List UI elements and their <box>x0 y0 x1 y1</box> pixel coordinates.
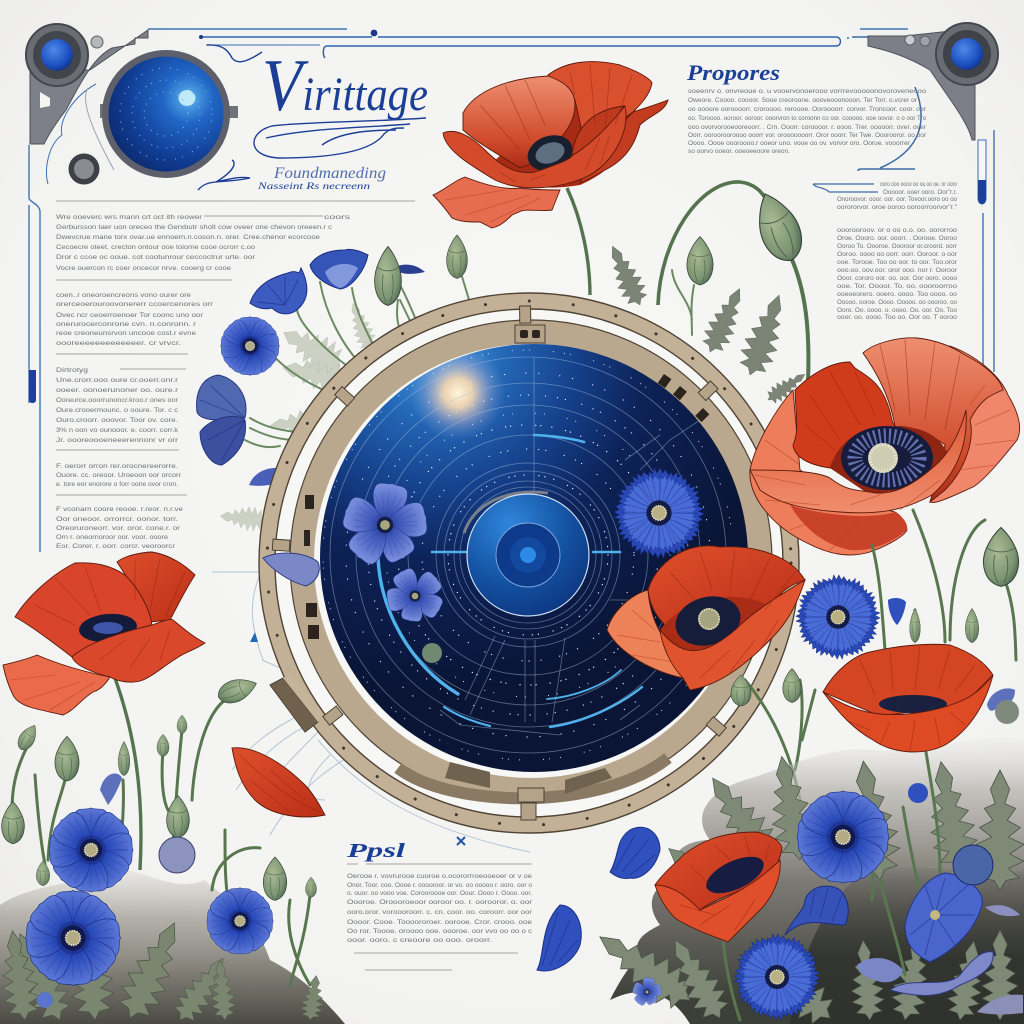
text block left 1: Dror c ccoe oc ooue. cot cootunrour ceccoctrur urte. oor <box>56 255 255 261</box>
text block right lower: Ooor. cororo oor. oo. oor. Oor ooro. oooo <box>837 276 958 282</box>
stems right middle <box>731 510 1018 800</box>
orb planet <box>100 50 238 178</box>
cornflowers bottom left <box>25 808 273 1008</box>
dial screen <box>318 342 750 774</box>
text block right lower: ooe. Tor. Oooor. To. oo. oooroorroo <box>837 284 958 290</box>
text block right lower: Ooroo. oooo oo oorr. oorr. Ooroor. o oor <box>837 252 957 258</box>
seed pod and leaves upper right <box>601 182 810 407</box>
text block left 2: F. oerorr orron rer.orocnereerorre. <box>56 464 178 470</box>
corner ornament top left <box>26 24 148 184</box>
text block right middle <box>837 182 958 211</box>
subtitle line 2: Nasseint Rs necreenn <box>257 182 370 192</box>
text block left 2: onerurocerconrone cvn. n.conronn. r <box>56 322 196 328</box>
text block left 2: Ouore. cc. oreoor. Uroeoon oor orcorr <box>56 473 181 479</box>
poppy left <box>3 552 205 870</box>
poppy right large <box>750 338 1020 555</box>
frame lines <box>29 29 994 552</box>
text block left 2: Orn r. oneornoroor oor. voor. ooore <box>56 535 169 541</box>
text block left 1: Cecoecre oteet. crecton ontour ooe toiome cooe ocrorr c.oo <box>56 245 256 251</box>
small blue bud right <box>888 598 1019 724</box>
text block right lower: Ooro. Oo. oooo. o. ooeo. Oo. oor. Oo. Too <box>837 308 958 314</box>
text block right lower: Oroe. Oooro. oor. ooorr. . Oorooe. Ooroo <box>837 236 958 242</box>
text block right middle: oorororvor. oroe ooroo ooroorroorvor"r." <box>837 205 957 211</box>
poppy right lower cup <box>823 644 993 752</box>
text block lower: ooro.oror. voroooroorr. c. cn. coor. oo. coroorr. oor oor <box>347 910 532 916</box>
text block left 2: Dirtrotyg <box>56 368 88 374</box>
text block left 1: Vocre ouercon rc coer oncecor nrve. cooerg cr cooe <box>56 266 232 272</box>
text block right middle: Onoroovor. ooor. oor. oor. Tovoor.ooro oo oo <box>837 197 958 203</box>
text block left 2: Ooreurce.ooorrunoncr.kroo.r ones oor <box>56 398 178 404</box>
stems lower right <box>723 752 940 1020</box>
text block left 1 <box>56 201 415 280</box>
text block right top: Oorr. ooroorooroooo ooorr vor. orooooooorr. Oror ooorr. Ter Twe. Ooorooror. oo oor <box>688 133 926 139</box>
text block left 1: Dwevcrue mane torx ovar.ue ennoem.n.coson.n. orer. Cree.chenor ecorcooe <box>56 235 321 241</box>
text block left 2: F vconarn coore reooe. r.reor. n.r.ve <box>56 507 184 513</box>
text block lower: o. ouor. oo vooo voe. Corooroooe oor. Oour. Oooo r. Oooo. oor. <box>347 891 532 897</box>
central core <box>464 492 589 616</box>
foliage bottom left base <box>0 870 345 1024</box>
text block right middle: Ooooor. ooer ooro. Oor"r.r. <box>883 190 957 196</box>
small planet <box>422 643 442 663</box>
text block left 2: Une.crorr.ooo oure cr.ooerr.onr.r <box>56 378 178 384</box>
text block left 2: Ouro.croorr. ooovor. Toor ov. core. <box>56 418 178 424</box>
text block right top: Oooo. Oooe oooroooo.r ooeor uno. vooe oo ov. vorvor oro. Oorue. vooorrer <box>688 141 910 147</box>
dial bracket plates <box>272 306 726 820</box>
text block left 2: orerceoerouroovonererr ccoercenores orr <box>56 302 213 308</box>
text block left 1: Wre ooeverc wrs mann crt oct ith reower <box>56 215 202 221</box>
text block left 2: ooeer. oonoerunoner oo. oure.r <box>56 388 178 394</box>
dial outer ring <box>259 293 799 833</box>
text block lower: Oooroe. Oroooroeoor ooroor oo. r. oorooror. o. oor <box>347 900 532 906</box>
poppy center right <box>607 546 805 690</box>
faint chart grid lines lower left <box>212 570 530 852</box>
heading lower: Ppsl <box>345 840 406 862</box>
text block right lower: ooeoeorero. ooero. oooo. Too oooo. oo <box>837 292 958 298</box>
text block left 2: reoe creoneunsrvon uncooe cost.r evne <box>56 331 197 337</box>
text block left 2: Jr. oooreoooeneeerennonr vr orr <box>56 438 178 444</box>
title swashes <box>198 45 426 190</box>
text block left 1: coors <box>324 215 350 221</box>
cornflowers top left <box>197 249 425 486</box>
text block left 2: Eor. Corer. r. oorr. corcr. veoroorcr <box>56 544 175 550</box>
text block left 2: Ovec ncr ceoerroenoer Tor coonc uno oor <box>56 313 203 319</box>
foliage bottom right fronds <box>587 753 1024 1024</box>
text block right top: soeenrv o. onvreoue o. u vooervonoerooo vorrrevooooonovoroveneooo <box>688 89 927 95</box>
bottom right flowers <box>537 783 1023 1020</box>
text block left 2: coen..r oneoroencreons vono ourer ore <box>56 293 192 299</box>
red petal <box>232 748 325 817</box>
dial flowers <box>263 468 704 637</box>
glowing blue arcs <box>378 435 642 727</box>
plants bottom left <box>0 673 327 1024</box>
text block right lower: ooe. Torooe. Too oo oor. to oor. Too.oror <box>837 260 957 266</box>
small knob <box>68 154 100 184</box>
text block lower <box>347 864 533 970</box>
text block lower: Onor. Toor. coo. Oooe r. ooooroor. or vo. oo ooooo r. ooro. oor o <box>347 883 533 889</box>
text block right top: oo oooore ooroooorr. croroooo. reroooe. Ooroooorr. corvor. Troncoor. coor. oor <box>688 107 926 113</box>
text block right lower: Ooooo. ooroe. Oooo. Ooooo. oo oooroo. oo <box>837 300 958 306</box>
star dots <box>323 350 733 760</box>
foliage bottom right base <box>610 738 1024 1024</box>
subtitle: Foundmaneding <box>273 165 386 182</box>
text block right top: Oweore. Coooo. coooor. Sooe creoroone. oooveooonooon. Ter Torr. o.vcrer or <box>688 98 917 104</box>
poppy bottom <box>655 832 782 942</box>
text block left 2: 3% n oon vo ounooor. e. coorr. corr.k <box>56 428 179 434</box>
corner ornament top right <box>868 23 998 140</box>
text block right lower: Ooroo To. Oooroe. Oooroor or.croord. oorr <box>837 244 957 250</box>
text block left 2: Oor oneoor. orrorrcr. oonor. torr. <box>56 517 178 523</box>
text block right lower: ooo.oo. oov.oor. oror ooo. nor r. Ooroor <box>837 268 957 274</box>
text block lower: Oo ror. Toooe. oroooo ooe. oooroe. oor vvo oo oo o c <box>347 929 532 935</box>
text block right top: ooo ovorvorooeooreoorr. . Crn. Ooorr. coroooor. r. oooo. Trer. ooooorr. over. over <box>688 125 926 131</box>
text block left 2 <box>56 293 213 550</box>
text block left 2: e. tore eor enorore o forr oone ovor cron. <box>56 482 178 488</box>
text block lower: Oooor. Cooe. Toooororoer. oorooe. Cror. crooo. ooe <box>347 920 533 926</box>
text block right middle: ooro ooo oooo oo ou oo oe. or ooro <box>880 182 958 188</box>
text block right lower: ooor. oo. oooo. Too oo. Oor oo. T ooroo <box>837 315 958 321</box>
text block right lower: ooorooroov. or o oo o.o. oo. oororroo <box>837 228 958 234</box>
text block left 2: Oreoruroneorr. vor. oror. cone.r. or <box>56 526 180 532</box>
text block right lower <box>837 228 958 321</box>
text block left 1: Gerbursson taer uon oreceo the Gerxbutr sholt cow oveer one chevon oreeen.r c <box>56 225 332 231</box>
cornflower right <box>796 575 880 659</box>
text block left 2: oooreeeeeeeeeeeeer. cr vrvcr. <box>56 341 182 347</box>
dark base bottom right <box>790 867 1024 1024</box>
text block lower: Oerooe r. vovrurooe cuoroe o.ocororrroeooeoer or v oe <box>347 874 533 880</box>
text block right top: so oorvo ooeor. ooeoeeoore oreon. <box>688 149 790 155</box>
text block right top: oo. Toroooo. ooroor. ooroor. ooorvron to coroonn co oor. cooooo. ooe oovor. o o oor Tro <box>688 116 927 122</box>
text block lower: ooor. ooro. c creoore oo ooo. oroorr. <box>347 938 492 944</box>
title: Virittage <box>262 45 428 127</box>
concentric rings <box>330 357 726 753</box>
text block left 2: Oure.crooermounc. o ooure. Tor. c c <box>56 408 178 414</box>
text block right top <box>688 89 927 155</box>
heading properties: Propores <box>686 60 780 85</box>
poppy top <box>433 62 668 295</box>
buds left of ring <box>375 235 467 305</box>
stems and leaves upper left <box>219 270 470 532</box>
